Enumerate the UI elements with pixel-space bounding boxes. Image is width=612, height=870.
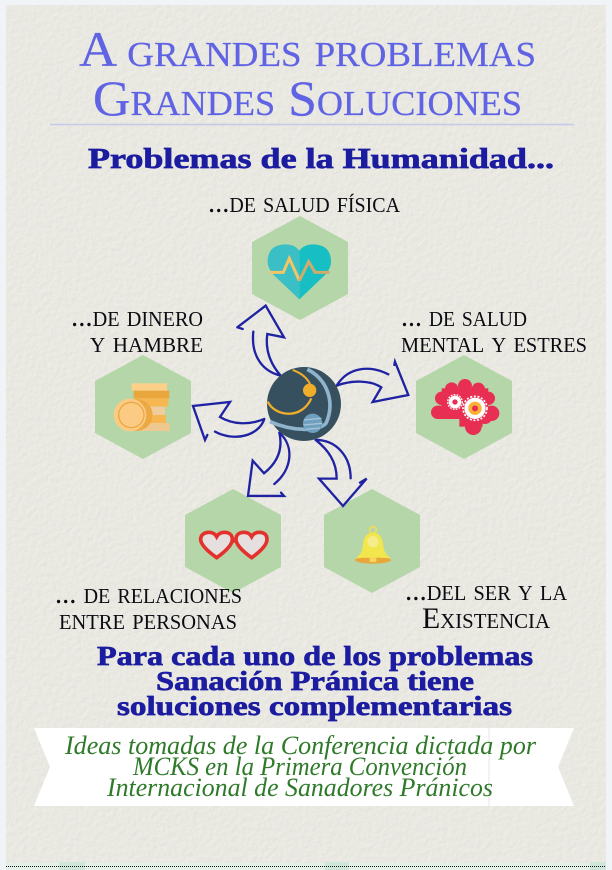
label: dinero y hambre: y hambre [90,326,203,359]
label: salud mental: mental y estres [401,326,587,359]
hexagon: salud mental [416,355,512,459]
ribbon with credits: MCKS en la Primera Convención [132,752,467,781]
title: A grandes problemas [79,21,536,77]
heading: soluciones [97,641,533,721]
label: dinero y hambre [71,300,203,359]
icon: bell [355,527,392,564]
ribbon with credits: Internacional de Sanadores Pránicos [106,773,493,802]
arrow: down-left [248,433,289,496]
arrow: left [193,402,264,440]
label: relaciones: ... de relaciones [55,577,242,610]
bottom strip [6,862,606,870]
label: ser y existencia [405,574,568,635]
arrow: up [237,306,284,376]
icon: brain with gears [431,379,499,435]
icon: heart glasses [201,532,267,558]
icon: coins [114,383,170,431]
hexagon: dinero [95,355,191,459]
icon: heart with pulse [268,244,331,299]
label: relaciones: entre personas [59,603,237,636]
arrow: right [337,362,408,402]
ribbon with credits [34,728,574,806]
label: ser y existencia: ...del ser y la [405,574,568,607]
heading: problemas: Problemas de la Humanidad... [88,143,554,175]
label: ser y existencia: Existencia [422,602,551,635]
ribbon with credits: Ideas tomadas de la Conferencia dictada por [64,731,537,760]
heading: soluciones: Para cada uno de los problemas [97,641,533,671]
title [79,21,536,126]
label: relaciones [55,577,242,636]
label: salud física: ...de salud física [208,186,401,219]
title: Grandes Soluciones [93,70,522,126]
arrow: down [316,440,367,506]
heading: soluciones: soluciones complementarias [117,691,512,721]
hexagon: relaciones [185,489,281,593]
heading: soluciones: Sanación Pránica tiene [156,666,474,696]
central diagram: planet and arrows [193,306,408,506]
hexagon: salud física [252,216,348,320]
icon: planet [267,367,341,441]
label: salud mental: ... de salud [401,300,527,333]
label: dinero y hambre: ...de dinero [71,300,203,333]
hexagon: ser y existencia [324,489,420,593]
label: salud mental [401,300,587,359]
